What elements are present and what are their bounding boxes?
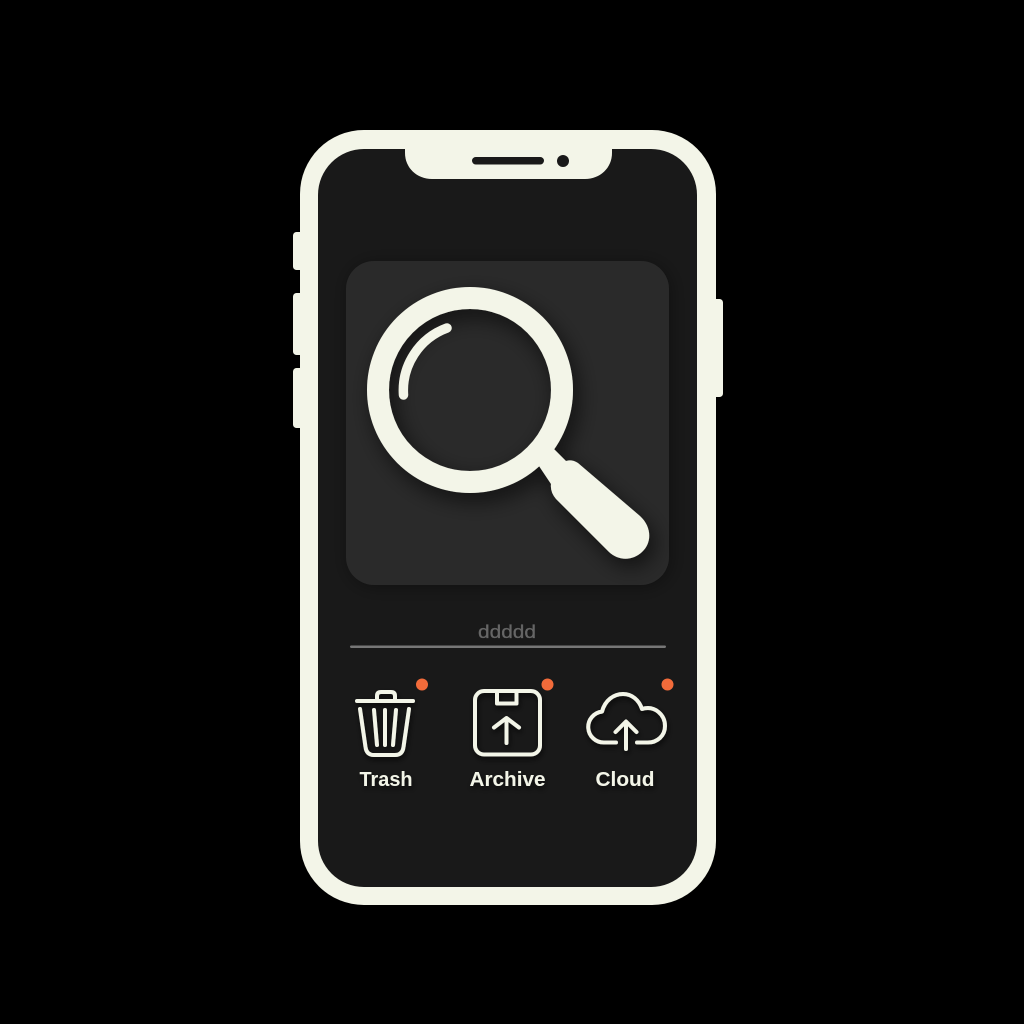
magnifier ring	[378, 298, 562, 482]
divider	[350, 646, 666, 648]
phone frame	[300, 130, 716, 905]
item: trash	[357, 678, 428, 791]
label: trash: Trash	[360, 769, 412, 791]
icon: cloud upload	[588, 694, 665, 749]
label: cloud: Cloud	[596, 769, 654, 791]
icon: trash can	[357, 692, 413, 755]
placeholder text: ddddd	[478, 622, 536, 642]
search panel	[346, 261, 669, 585]
label: archive: Archive	[470, 769, 546, 791]
notch	[405, 149, 612, 179]
screen	[318, 149, 697, 887]
notification dot	[662, 678, 674, 690]
icon: archive box	[475, 691, 540, 754]
speaker	[472, 157, 544, 164]
lens highlight	[403, 328, 447, 395]
camera	[557, 155, 569, 167]
magnifier handle	[539, 448, 649, 559]
phone	[293, 130, 723, 905]
item: cloud	[588, 678, 674, 791]
notification dot	[416, 678, 428, 690]
item: archive	[470, 678, 554, 791]
notification dot	[542, 678, 554, 690]
icon: magnifying glass	[378, 298, 649, 559]
side buttons	[293, 232, 723, 428]
